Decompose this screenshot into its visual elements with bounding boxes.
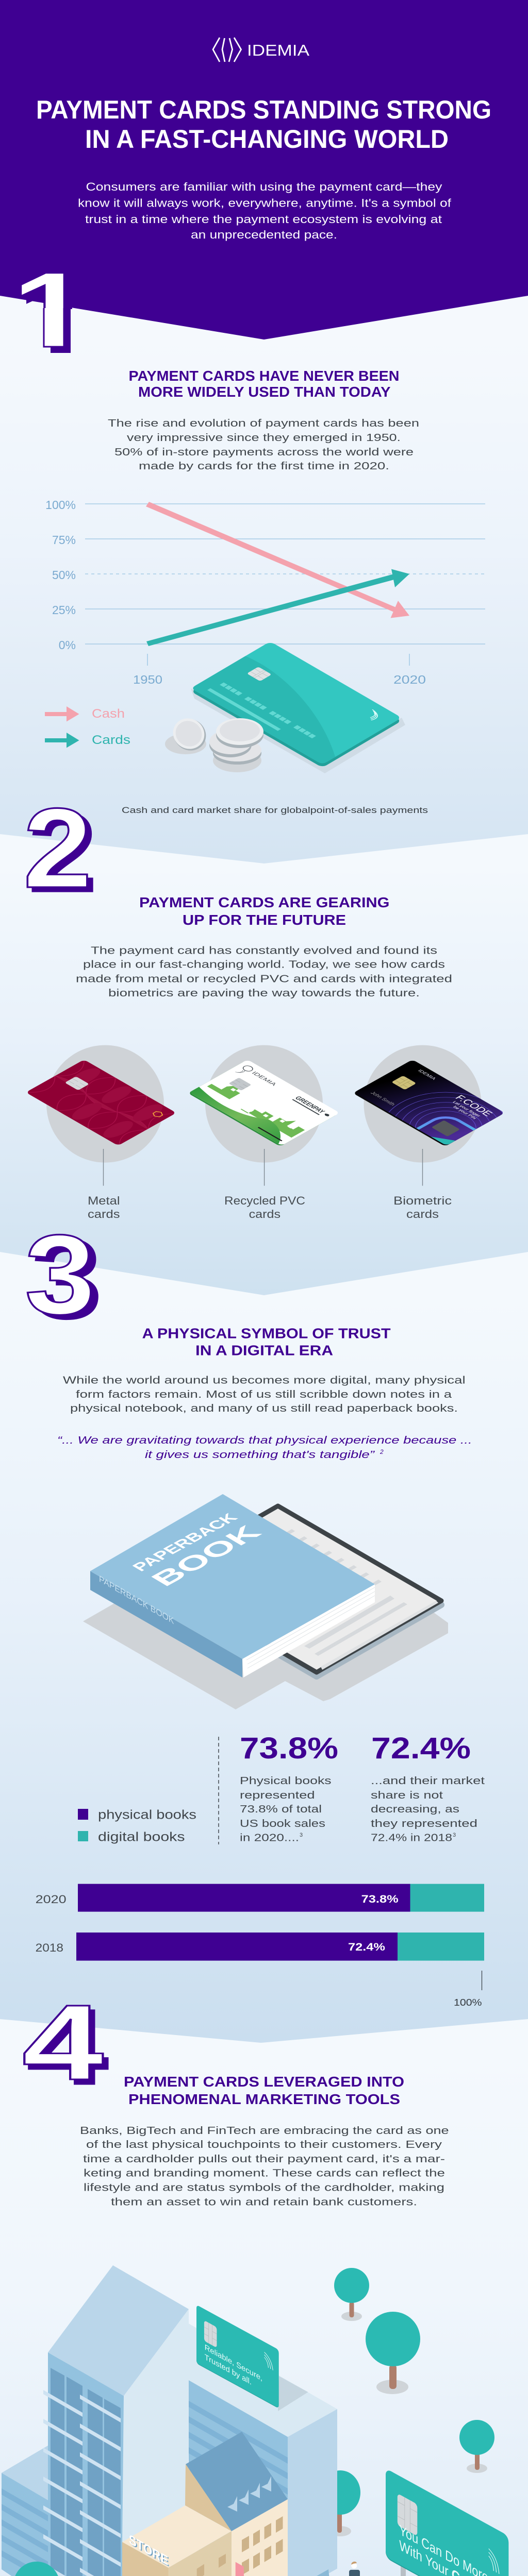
chart axis labels: 50% xyxy=(52,568,76,582)
axis marker: 100%: 100% xyxy=(454,1997,482,2008)
label: recycled PVC cards: cards xyxy=(249,1208,280,1221)
chart axis labels: 0% xyxy=(59,638,76,652)
illustration: city scene xyxy=(2,2265,519,2576)
label: biometric cards: Biometric xyxy=(393,1194,452,1207)
section 4 heading xyxy=(124,2074,404,2107)
stat: 72.4%: ...and their market xyxy=(371,1775,485,1787)
card type: recycled PVC: IDEMIA xyxy=(250,1071,278,1087)
chart axis labels: 25% xyxy=(52,603,76,617)
section 2 background xyxy=(0,824,528,1295)
section 2 heading: PAYMENT CARDS ARE GEARING xyxy=(139,894,390,910)
logo: IDEMIA xyxy=(213,38,309,62)
label: recycled PVC cards: Recycled PVC xyxy=(224,1194,305,1207)
number 3: 3 xyxy=(25,1212,95,1338)
section 2 heading: UP FOR THE FUTURE xyxy=(183,912,346,928)
number 1: 1 xyxy=(18,256,98,376)
stat: 72.4%: 72.4% in 2018 xyxy=(371,1832,452,1843)
section 3 text: physical notebook, and many of us still read paperback books. xyxy=(70,1402,458,1414)
book: BOOK xyxy=(144,1521,268,1590)
chart axis labels: 100% xyxy=(45,498,76,512)
billboard: reliable, secure: Trusted by all. xyxy=(205,2352,252,2387)
bar: 2018: 2018 xyxy=(36,1941,63,1954)
trees: left and right xyxy=(13,2562,519,2576)
section 4 text: of the last physical touchpoints to their customers. Every xyxy=(86,2139,442,2150)
section 1 text: made by cards for the first time in 2020. xyxy=(139,460,389,472)
section 2 text: biometrics are paving the way towards the future. xyxy=(108,987,420,999)
chart line: cash xyxy=(146,502,409,618)
illustration: paperback book and tablet xyxy=(83,1494,448,1709)
store sign: STORE xyxy=(129,2532,168,2569)
section 1 heading xyxy=(129,368,399,400)
billboard: reliable, secure: Reliable, Secure, xyxy=(205,2343,262,2383)
card type: recycled PVC: GREENPAY xyxy=(293,1095,327,1114)
chart line: cards xyxy=(146,569,409,646)
legend: cash and cards: Cards xyxy=(92,733,130,747)
section 3 background xyxy=(0,1236,528,2043)
card type: biometric: be your PIN xyxy=(452,1105,477,1120)
benches xyxy=(106,2569,458,2576)
quote: “... We are gravitating towards that physical experience because ... xyxy=(57,1434,472,1446)
label: recycled PVC cards xyxy=(224,1149,305,1221)
stat: 73.8% xyxy=(240,1732,338,1843)
section 2 text: made from metal or recycled PVC and cards with integrated xyxy=(76,973,452,985)
logo: IDEMIA: IDEMIA xyxy=(247,41,309,59)
stat: 73.8%: 73.8% xyxy=(240,1732,338,1765)
section 3 text: form factors remain. Most of us still scribble down notes in a xyxy=(76,1388,452,1400)
section 1 text: 50% of in-store payments across the world were xyxy=(114,446,414,458)
bar: 2020: 73.8% xyxy=(361,1893,399,1905)
section 3 text xyxy=(63,1375,466,1414)
chart axis labels xyxy=(45,498,76,652)
building: tall tower xyxy=(43,2265,189,2576)
tablet xyxy=(153,1506,441,1676)
card type: recycled PVC xyxy=(188,1045,340,1221)
stat: 72.4%: 72.4% xyxy=(371,1732,471,1765)
building: store xyxy=(122,2432,288,2576)
store sign: STORE xyxy=(130,2533,169,2570)
title xyxy=(36,95,491,154)
section 1 text xyxy=(108,417,419,472)
number 4: 4 xyxy=(22,1982,104,2102)
bar: 2018: 72.4% xyxy=(348,1941,385,1953)
intro text: trust in a time where the payment ecosystem is evolving at xyxy=(85,213,442,226)
label: metal cards: Metal xyxy=(88,1194,120,1207)
chart caption: Cash and card market share for globalpoint-of-sales payments xyxy=(122,805,428,815)
section 4 text: them an asset to win and retain bank customers. xyxy=(111,2196,417,2208)
section 2 text xyxy=(76,945,452,999)
billboard: you can do more with your card xyxy=(382,2468,508,2576)
title: PAYMENT CARDS STANDING STRONG xyxy=(36,95,491,124)
section 3 text: While the world around us becomes more digital, many physical xyxy=(63,1375,466,1386)
axis marker: 100% xyxy=(454,1971,482,2008)
chart year labels: 2020 xyxy=(393,673,426,686)
section 4 text: Banks, BigTech and FinTech are embracing the card as one xyxy=(80,2125,449,2137)
quote: 2 xyxy=(380,1448,384,1455)
quote xyxy=(57,1434,472,1461)
section 3 heading: IN A DIGITAL ERA xyxy=(195,1343,333,1359)
stat: 72.4%: share is not xyxy=(371,1789,443,1801)
section 4 heading: PHENOMENAL MARKETING TOOLS xyxy=(128,2091,400,2107)
chart axis labels: 75% xyxy=(52,533,76,547)
stat: 72.4% xyxy=(371,1732,485,1843)
legend: physical and digital books: physical books xyxy=(98,1808,196,1822)
number 3: 3 xyxy=(31,1216,102,1342)
billboard: reliable, secure xyxy=(196,2305,279,2409)
section 4 text: lifestyle and are status symbols of the cardholder, making xyxy=(84,2181,444,2194)
building: annex xyxy=(2,2446,52,2576)
card type: biometric: Let your finger xyxy=(452,1100,482,1117)
card type: biometric xyxy=(355,1045,503,1218)
book: PAPERBACK xyxy=(128,1511,242,1574)
chart year labels: 1950 xyxy=(133,673,162,686)
stat: 73.8%: Physical books xyxy=(240,1775,332,1787)
trees: background xyxy=(320,2268,494,2536)
illustration: teal card and coins xyxy=(165,641,405,773)
book xyxy=(90,1494,375,1677)
stat: 73.8%: represented xyxy=(240,1789,315,1801)
legend: physical and digital books: digital books xyxy=(98,1830,185,1844)
label: metal cards: cards xyxy=(88,1208,120,1221)
bar: 2020: 2020 xyxy=(36,1893,67,1906)
section 2 text: The payment card has constantly evolved and found its xyxy=(91,945,437,956)
section 3 heading: A PHYSICAL SYMBOL OF TRUST xyxy=(142,1325,391,1342)
divider xyxy=(218,1737,219,1844)
intro text: Consumers are familiar with using the payment card—they xyxy=(86,180,442,193)
person: man with shopping bag xyxy=(342,2562,361,2576)
section 4 text: keting and branding moment. These cards can reflect the xyxy=(84,2167,445,2179)
section 4 text xyxy=(80,2125,449,2208)
number 2: 2 xyxy=(23,785,92,911)
book: PAPERBACK BOOK xyxy=(99,1573,174,1626)
bar: 2018 xyxy=(36,1933,484,1961)
number 4: 4 xyxy=(27,1987,108,2107)
bar chart: book share xyxy=(36,1884,484,2008)
stat: 72.4%: 3 xyxy=(453,1832,456,1838)
building: rear block xyxy=(189,2324,337,2576)
section 1 heading: PAYMENT CARDS HAVE NEVER BEEN xyxy=(129,368,399,384)
number 1: 1 xyxy=(11,250,91,369)
number 1 xyxy=(22,274,72,353)
section 1 background xyxy=(0,258,528,863)
legend: cash and cards xyxy=(45,706,130,748)
label: metal cards xyxy=(88,1149,120,1221)
card type: metal xyxy=(26,1045,178,1221)
intro text xyxy=(78,180,452,241)
section 4 text: time a cardholder pulls out their payment card, it's a mar- xyxy=(83,2153,445,2165)
label: biometric cards: cards xyxy=(406,1208,439,1221)
section 1 heading: MORE WIDELY USED THAN TODAY xyxy=(138,384,391,400)
title: IN A FAST-CHANGING WORLD xyxy=(85,125,449,154)
stat: 73.8%: US book sales xyxy=(240,1818,325,1829)
number 2: 2 xyxy=(28,789,97,916)
intro text: know it will always work, everywhere, anytime. It's a symbol of xyxy=(78,197,452,209)
section 1 text: The rise and evolution of payment cards has been xyxy=(108,417,419,429)
section 3 heading xyxy=(142,1325,391,1359)
stat: 73.8%: in 2020.... xyxy=(240,1832,299,1843)
stat: 72.4%: they represented xyxy=(371,1818,477,1829)
header background xyxy=(0,0,528,340)
section 2 heading xyxy=(139,894,390,928)
section 1 text: very impressive since they emerged in 1950. xyxy=(127,432,401,444)
chart year labels xyxy=(133,673,426,686)
section 4 background xyxy=(0,2009,528,2576)
stat: 72.4%: decreasing, as xyxy=(371,1803,459,1815)
card type: biometric: F.CODE xyxy=(453,1094,494,1118)
stat: 73.8%: 3 xyxy=(300,1832,303,1838)
section 4 heading: PAYMENT CARDS LEVERAGED INTO xyxy=(124,2074,404,2090)
quote: it gives us something that's tangible” xyxy=(145,1449,375,1461)
intro text: an unprecedented pace. xyxy=(191,228,337,241)
bar: 2020 xyxy=(36,1884,484,1912)
card type: biometric: John Smith xyxy=(369,1091,396,1107)
section 2 text: place in our fast-changing world. Today, we see how cards xyxy=(83,959,445,971)
stat: 73.8%: 73.8% of total xyxy=(240,1803,322,1815)
legend: cash and cards: Cash xyxy=(92,707,125,721)
label: biometric cards xyxy=(393,1149,452,1221)
legend: physical and digital books xyxy=(78,1808,196,1844)
card type: biometric: IDEMIA xyxy=(417,1069,437,1080)
line chart: cash and card share xyxy=(45,498,485,686)
